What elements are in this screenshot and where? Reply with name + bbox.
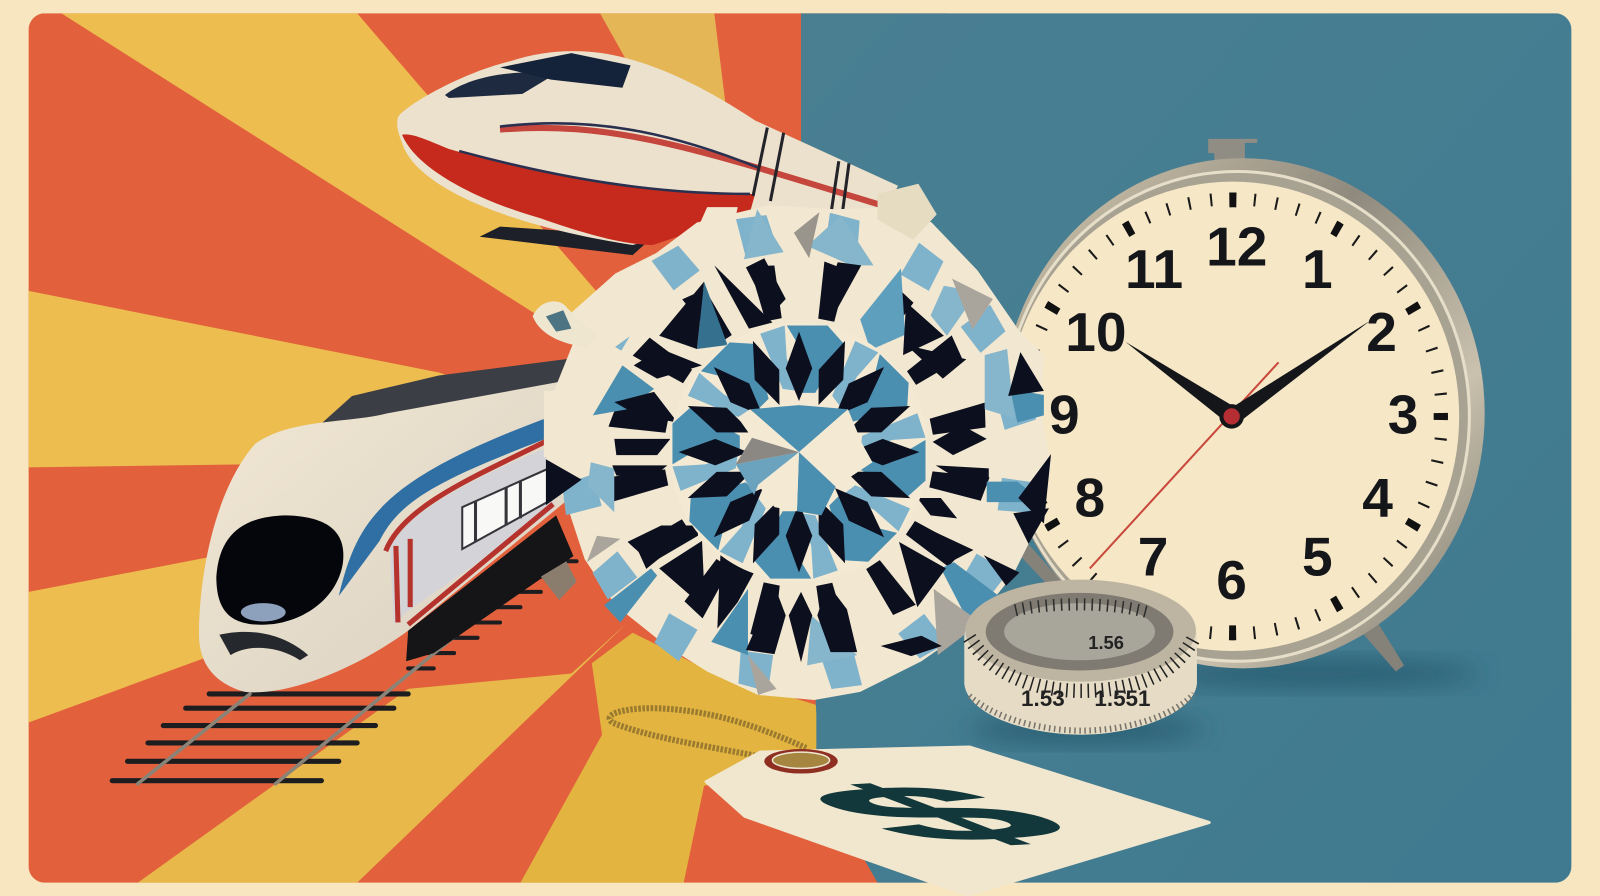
lower bullet train [199, 357, 582, 692]
upper bullet train [397, 51, 898, 255]
windshield glare [241, 603, 286, 621]
railway track [112, 561, 577, 784]
black outer facets [546, 258, 1051, 662]
clock bezel [1004, 171, 1469, 661]
stripes [500, 128, 888, 207]
clock shadow [1153, 659, 1480, 688]
train skid [480, 227, 653, 255]
tape labels: 1.53 [1021, 686, 1065, 711]
clock face [1006, 182, 1459, 651]
clock numerals: 8 [1074, 466, 1105, 528]
red trim [386, 439, 553, 625]
blue stripe [339, 416, 551, 596]
tag shape [706, 747, 1209, 895]
clock [1001, 139, 1485, 688]
windshield upper [500, 53, 631, 88]
clock crown [1208, 139, 1257, 161]
stray diamond chips [533, 184, 937, 600]
windows [462, 467, 551, 549]
second hand [1090, 362, 1279, 568]
red belly [402, 134, 755, 245]
dollar sign: $ [745, 768, 1131, 859]
clock numerals: 9 [1049, 384, 1080, 446]
tape labels [1021, 632, 1151, 711]
clock numerals: 5 [1302, 526, 1333, 588]
tape ticks [969, 638, 1194, 691]
diamond [544, 205, 1051, 700]
side panel [390, 446, 553, 625]
train body [397, 51, 898, 245]
price tag [706, 747, 1209, 895]
diamond outline [546, 205, 1051, 700]
train roof [321, 357, 582, 424]
hour hand [1126, 342, 1237, 422]
clock numerals: 7 [1138, 526, 1168, 588]
window dividers [476, 481, 520, 542]
clock case [1001, 158, 1485, 668]
tape shadow [969, 715, 1204, 744]
windshield front [445, 72, 556, 98]
outer blue facets [587, 209, 1044, 695]
minute hand [1228, 320, 1370, 422]
undercarriage shadow [406, 515, 573, 661]
train body [199, 380, 571, 692]
tape outer band [964, 580, 1197, 735]
windshield [216, 515, 343, 625]
regular facet layer [559, 212, 1039, 692]
hub [1221, 406, 1242, 427]
gold chain [610, 708, 806, 760]
front grille [219, 632, 308, 660]
center star [736, 405, 872, 515]
middle blue ring [669, 322, 929, 582]
clock numerals: 4 [1362, 466, 1393, 528]
clock numerals: 3 [1388, 384, 1418, 446]
tape top roll [965, 580, 1196, 682]
navy line [459, 123, 760, 194]
cream left edge facets [544, 207, 738, 457]
clock numerals: 10 [1065, 301, 1127, 363]
clock feet [1362, 622, 1404, 671]
clock numerals: 11 [1125, 238, 1183, 300]
tape labels: 1.551 [1094, 686, 1151, 711]
tag eyelet [764, 749, 838, 774]
tape labels: 1.56 [1088, 632, 1124, 653]
clock numerals: 1 [1302, 238, 1333, 300]
clock numerals: 2 [1366, 301, 1397, 363]
inner spike ring [679, 332, 919, 572]
clock numerals [1049, 215, 1418, 611]
clock numerals: 6 [1216, 549, 1247, 611]
measuring tape [964, 580, 1204, 744]
minute ticks [1023, 199, 1442, 634]
clock numerals: 12 [1206, 215, 1267, 277]
door seams [753, 128, 849, 209]
